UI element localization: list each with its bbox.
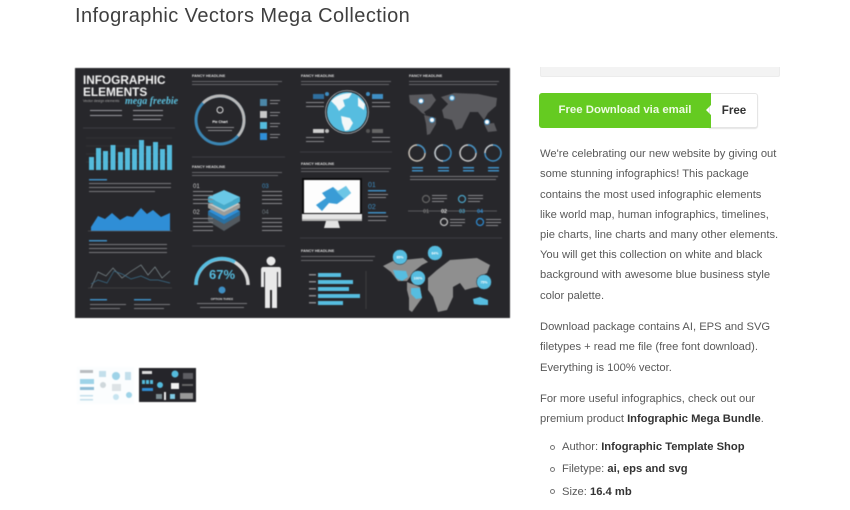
donut chart	[196, 96, 244, 144]
heading: layers panel	[192, 165, 282, 176]
ring labels	[410, 167, 499, 180]
heading: horizontal bars panel	[301, 249, 375, 261]
description text: some stunning infographics! This package	[540, 168, 749, 180]
description text: background with awesome blue business style	[540, 269, 770, 281]
heading: horizontal bars panel: FANCY HEADLINE	[301, 249, 335, 253]
description text	[540, 148, 778, 302]
layer labels: 03	[262, 184, 269, 190]
green button	[539, 93, 711, 128]
description text: We're celebrating our new website by giving out	[540, 148, 776, 160]
description text: like world map, human infographics, timelines,	[540, 209, 769, 221]
description text: pie charts, line charts and many other elements.	[540, 229, 778, 241]
bundle text: premium product Infographic Mega Bundle.	[540, 413, 764, 425]
pie chart legend	[260, 99, 280, 140]
price tag: free: Free	[722, 104, 746, 117]
world map with bubbles: 64%	[431, 252, 439, 256]
bundle text: For more useful infographics, check out our	[540, 393, 755, 405]
gauge 67%: 67%	[209, 267, 235, 282]
layer labels: 01	[193, 184, 200, 190]
timeline: 03	[459, 209, 465, 215]
monitor options	[368, 182, 388, 221]
heading: monitor panel	[301, 162, 391, 172]
thumbnail: dark version	[138, 367, 197, 403]
timeline: 01	[423, 209, 429, 215]
bundle text	[540, 393, 764, 425]
text block: area chart caption	[89, 240, 167, 253]
bar chart	[86, 138, 172, 170]
gauge 67%	[196, 259, 248, 308]
heading: layers panel: FANCY HEADLINE	[192, 165, 226, 169]
price tag: free	[709, 93, 758, 128]
progress rings	[409, 145, 501, 161]
world map with bubbles: 85%	[396, 256, 404, 260]
details list: Filetype: ai, eps and svg	[562, 463, 688, 475]
layer labels: 02	[193, 210, 200, 216]
green button: Free Download via email	[559, 104, 691, 116]
heading: pie chart panel: FANCY HEADLINE	[192, 74, 226, 78]
poster heading: Vector design elements	[83, 99, 120, 103]
poster heading: INFOGRAPHIC	[83, 73, 166, 87]
timeline: 04	[477, 209, 484, 215]
poster heading: mega freebie	[125, 96, 179, 107]
package text	[540, 321, 770, 374]
text block: line chart captions	[90, 299, 170, 309]
heading: globe panel	[301, 74, 391, 85]
heading: dotted map panel	[409, 74, 499, 85]
world map with bubbles: 75%	[480, 280, 488, 284]
donut chart: Pie Chart	[212, 120, 229, 124]
details list: Author: Infographic Template Shop	[562, 441, 745, 453]
dotted world map	[409, 93, 497, 135]
poster heading: ELEMENTS	[83, 85, 147, 99]
package text: Everything is 100% vector.	[540, 362, 672, 374]
globe callouts	[306, 92, 390, 142]
heading: monitor panel: FANCY HEADLINE	[301, 162, 335, 166]
details list	[550, 441, 745, 498]
gauge 67%: OPTION THREE	[211, 297, 233, 301]
world map with bubbles: 100%	[414, 276, 423, 280]
intro text lines	[90, 110, 163, 120]
globe	[326, 90, 368, 134]
timeline: 02	[441, 209, 447, 215]
icon: person figure	[261, 256, 281, 308]
download button	[539, 93, 758, 129]
layer labels: 04	[262, 210, 269, 216]
monitor options: 01	[368, 182, 376, 189]
icon: monitor with puzzle	[302, 178, 362, 228]
horizontal bar chart	[309, 271, 366, 309]
poster heading	[83, 73, 179, 107]
world map with bubbles	[383, 246, 492, 312]
layer stack icon	[208, 190, 240, 231]
heading: globe panel: FANCY HEADLINE	[301, 74, 335, 78]
line chart	[88, 265, 172, 288]
empty grey bar	[540, 67, 780, 77]
heading: dotted map panel: FANCY HEADLINE	[409, 74, 443, 78]
timeline	[408, 195, 501, 226]
thumbnail: white version	[79, 369, 133, 402]
area chart	[88, 208, 172, 231]
package text: Download package contains AI, EPS and SVG	[540, 321, 770, 333]
text block: option one	[89, 179, 171, 192]
layer labels	[193, 184, 282, 231]
package text: filetypes + read me file (free font download).	[540, 341, 758, 353]
details list: Size: 16.4 mb	[562, 486, 632, 498]
description text: color palette.	[540, 290, 604, 302]
title: Infographic Vectors Mega Collection	[75, 5, 410, 27]
heading: pie chart panel	[192, 74, 282, 85]
monitor options: 02	[368, 204, 376, 211]
description text: contains the most used infographic elements	[540, 189, 761, 201]
description text: You will get this collection on white and black	[540, 249, 762, 261]
